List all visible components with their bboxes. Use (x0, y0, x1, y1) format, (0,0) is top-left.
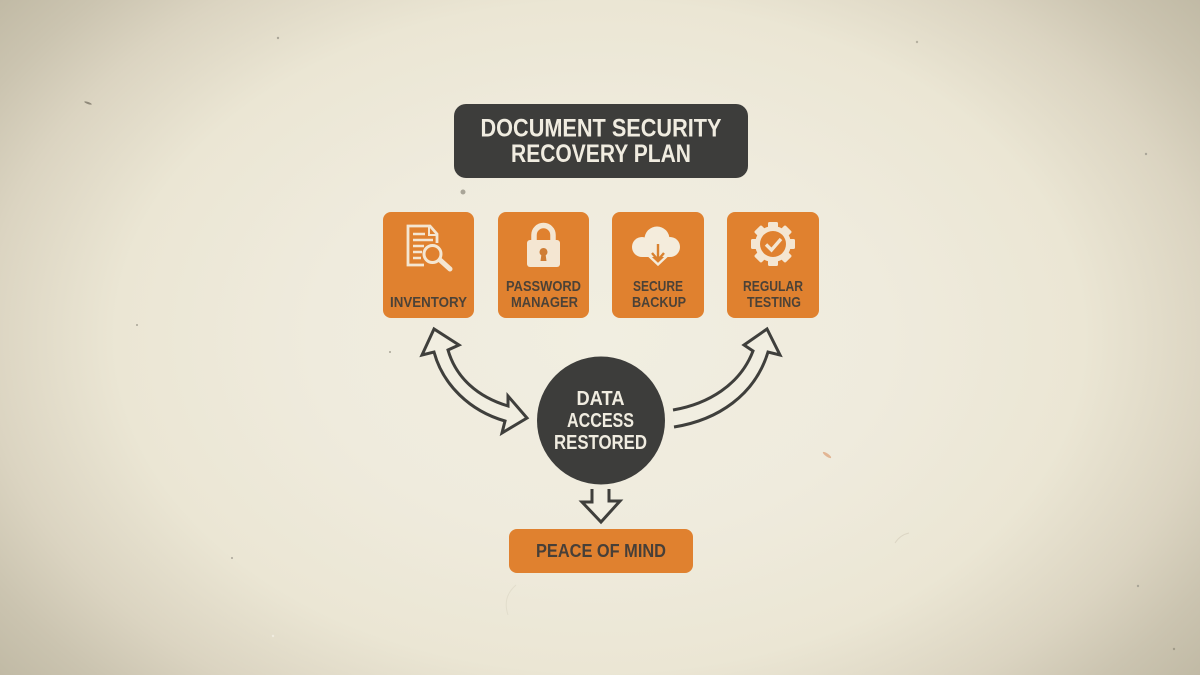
panel: password manager: MANAGER (511, 294, 578, 311)
panel: regular testing: TESTING (747, 294, 801, 311)
panel: secure backup: SECURE (633, 278, 683, 295)
arrow: two-way inventory to data access (422, 329, 527, 433)
title banner: DOCUMENT SECURITY (480, 114, 722, 142)
panel: secure backup (612, 212, 704, 318)
center circle: data access restored: RESTORED (554, 432, 647, 454)
panel: inventory (383, 212, 474, 318)
title banner (454, 104, 748, 178)
panel: inventory: INVENTORY (390, 294, 467, 311)
center circle: data access restored: DATA (576, 388, 624, 410)
icon: padlock (527, 226, 560, 267)
panel: regular testing: REGULAR (743, 278, 803, 295)
icon: document with magnifier (408, 226, 450, 269)
title banner: RECOVERY PLAN (511, 140, 691, 168)
arrow: down to peace of mind (582, 489, 620, 522)
panel: regular testing (727, 212, 819, 318)
panel: secure backup: BACKUP (632, 294, 686, 311)
panel: password manager: PASSWORD (506, 278, 581, 295)
center circle: data access restored (537, 356, 665, 484)
panel: password manager (498, 212, 589, 318)
outcome box: peace of mind: PEACE OF MIND (536, 541, 666, 561)
outcome box: peace of mind (509, 529, 693, 573)
center circle: data access restored: ACCESS (567, 410, 634, 432)
icon: gear with check (751, 222, 795, 266)
icon: cloud download (632, 226, 680, 264)
arrow: data access to regular testing (673, 329, 780, 427)
